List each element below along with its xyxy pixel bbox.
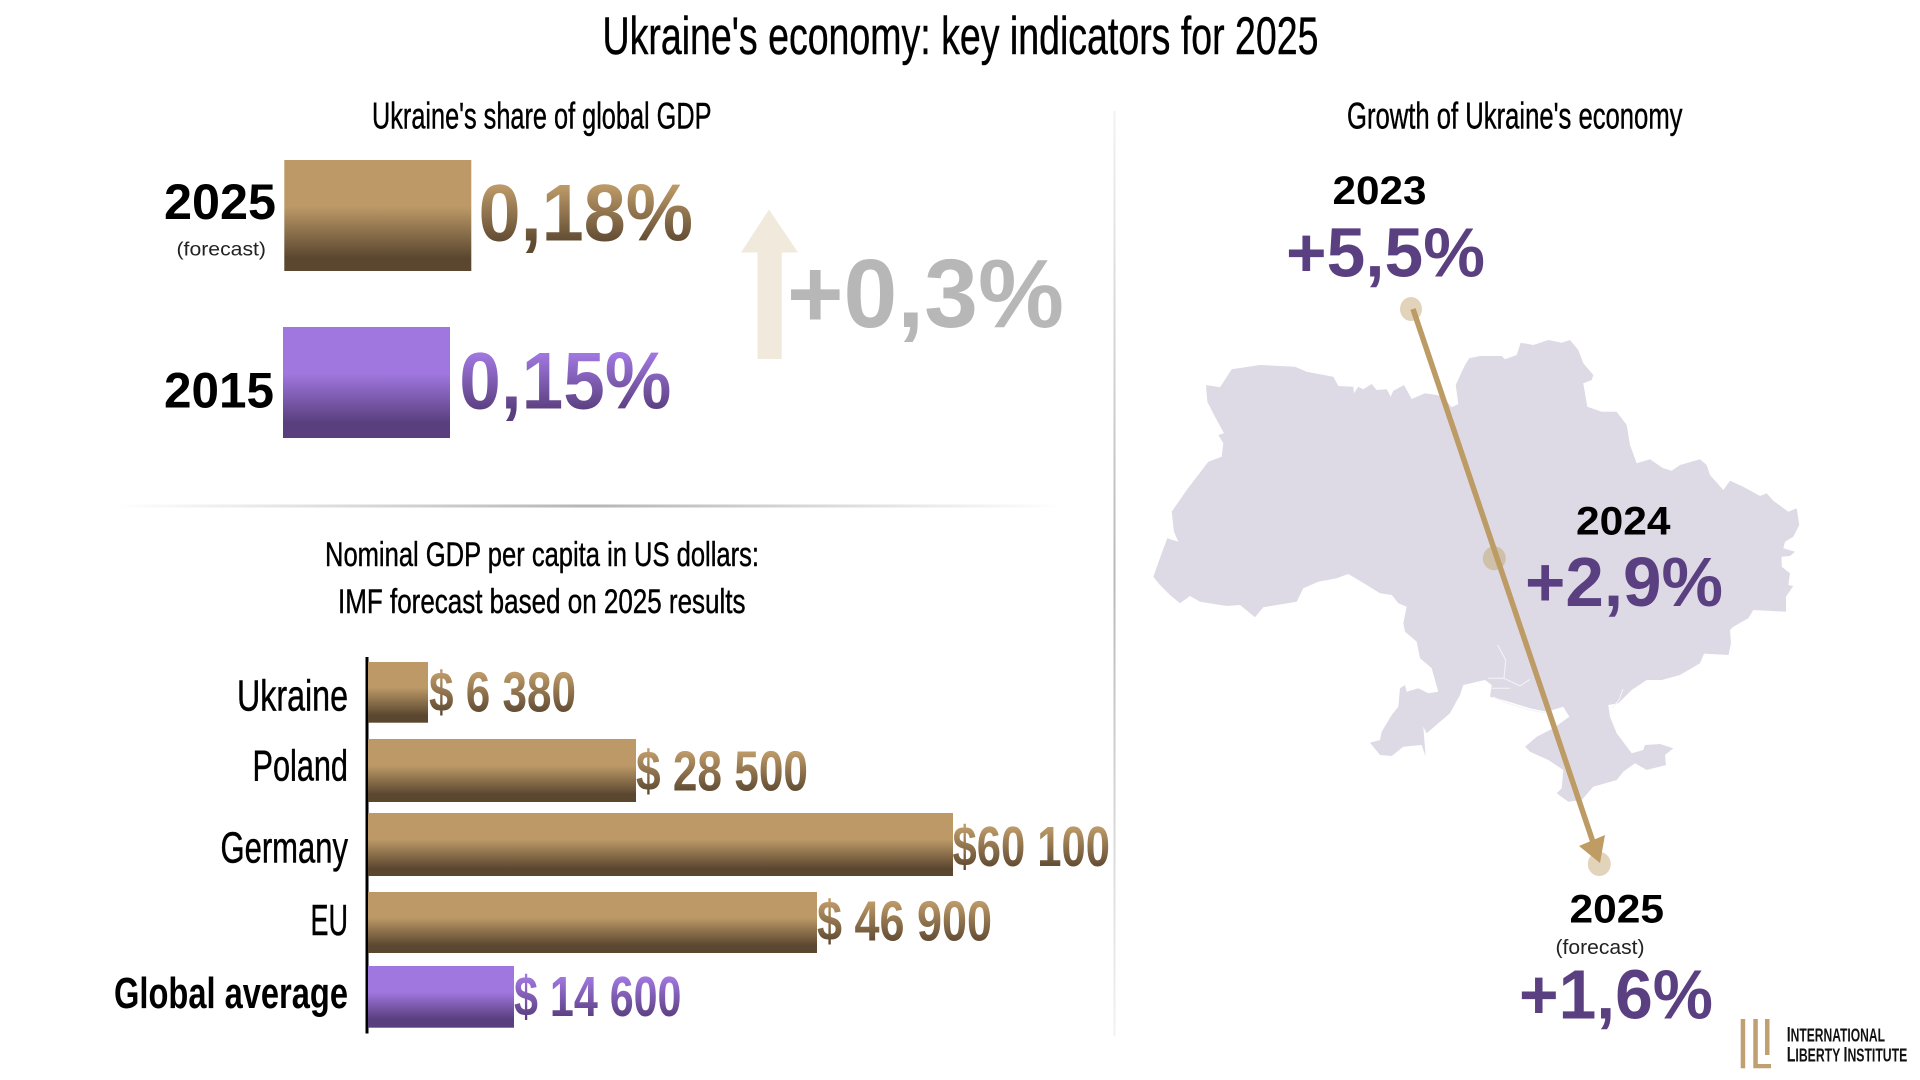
row: Ukraine [237,661,576,725]
year label: 2025 forecast: 2025 [164,174,276,230]
heading: growth of Ukraine's economy: Growth of Ukraine's economy [1347,96,1683,136]
value: 0,18%: 0,18% [478,169,693,259]
row: EU: EU [310,896,348,945]
panel: Ukraine's share of global GDP [164,96,1064,438]
row: Global average: $ 14 600 [514,965,682,1029]
row: Poland [252,739,808,804]
row: Ukraine: Ukraine [237,672,348,721]
logo text [1787,1024,1907,1067]
logo: International Liberty Institute [1741,1019,1907,1068]
row: Ukraine: $ 6 380 [429,661,576,725]
heading: nominal GDP per capita: Nominal GDP per capita in US dollars: [325,536,759,574]
row: Germany: $60 100 [952,815,1110,879]
row: EU [310,890,992,954]
row: EU: $ 46 900 [817,890,992,954]
heading: nominal GDP per capita [325,536,759,621]
point: 2023 [1400,297,1422,321]
point: 2024 [1483,546,1506,570]
row: Germany [220,813,1110,879]
row: Germany: Germany [220,823,348,872]
arrow: growth trend [1413,309,1605,863]
row: Global average: Global average [114,969,348,1018]
year label: 2025 forecast [164,174,276,260]
row: Poland: Poland [252,741,348,790]
arrow: increase [741,210,798,359]
label: 2025 forecast growth: +1,6% [1519,955,1713,1033]
title: Ukraine's economy: key indicators for 2025 [602,7,1318,66]
label: 2023 growth [1286,169,1485,292]
row: Global average [114,965,682,1029]
logo mark [1741,1019,1771,1068]
bar: 2025 share [284,160,471,271]
label: 2023 growth: +5,5% [1286,214,1485,292]
label: 2025 forecast growth: 2025 [1570,888,1664,932]
label: 2025 forecast growth: (forecast) [1556,937,1644,959]
label: 2024 growth: 2024 [1576,500,1671,544]
value: +0,3%: +0,3% [787,239,1064,348]
point: 2025 [1588,852,1611,876]
value: 0,15%: 0,15% [459,336,671,426]
year label: 2015: 2015 [164,362,274,418]
heading: nominal GDP per capita: IMF forecast based on 2025 results [338,583,746,621]
bar: 2015 share [283,327,450,438]
label: 2025 forecast growth [1519,888,1713,1033]
year label: 2025 forecast: (forecast) [176,240,266,260]
heading: share of global GDP: Ukraine's share of global GDP [372,96,712,136]
row: Poland: $ 28 500 [636,740,808,804]
axis line [366,657,368,1034]
panel: growth of Ukraine's economy [1153,96,1799,1033]
label: 2023 growth: 2023 [1332,169,1426,213]
label: 2024 growth [1525,500,1723,621]
panel: nominal GDP per capita [114,536,1110,1034]
map of Ukraine [1153,340,1799,802]
label: 2024 growth: +2,9% [1525,543,1723,621]
